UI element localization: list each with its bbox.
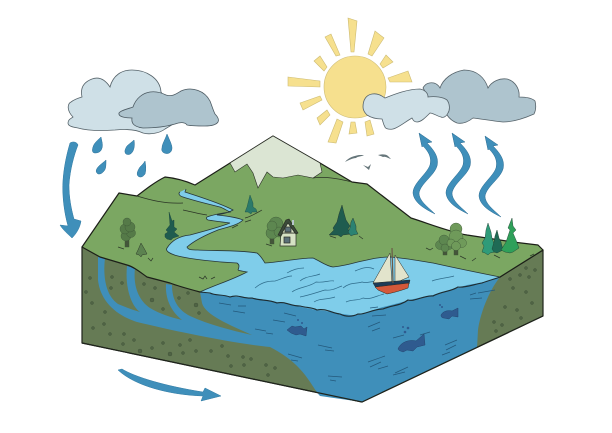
soil pebbles	[84, 266, 536, 376]
raindrops	[92, 134, 172, 177]
river and shore outline	[167, 189, 500, 292]
pines, right	[482, 218, 519, 255]
cloud: rain light	[68, 70, 180, 134]
lake front edge	[200, 277, 500, 316]
river and lake surface	[167, 189, 500, 315]
pine, riverside	[165, 212, 179, 240]
block soil	[82, 247, 543, 402]
cloud: rain dark	[119, 89, 218, 128]
arrow: underground flow	[118, 369, 221, 401]
deep water ripples	[219, 290, 495, 381]
grass tufts	[118, 220, 534, 279]
round tree, left	[120, 218, 136, 247]
house	[278, 219, 298, 246]
underground water and lake body	[98, 257, 500, 402]
cloud: right light	[363, 89, 449, 129]
birds	[345, 154, 391, 170]
snow cap	[230, 136, 322, 188]
small shrub pine, left	[136, 243, 147, 257]
sun	[288, 18, 412, 143]
arrow: rain falling	[60, 142, 81, 238]
tree beside house	[266, 217, 284, 244]
fish	[287, 308, 458, 352]
trees, right	[436, 223, 466, 255]
land surface	[82, 136, 543, 292]
arrows: evaporation	[413, 133, 504, 217]
lake ripples	[255, 268, 454, 302]
small pine, upper	[245, 195, 257, 214]
cloud: right dark	[423, 70, 536, 123]
bubbles	[297, 304, 443, 333]
sailboat	[373, 248, 410, 294]
ridge lines	[137, 177, 352, 218]
block bottom outline	[82, 316, 543, 402]
pines, centre	[329, 205, 358, 237]
